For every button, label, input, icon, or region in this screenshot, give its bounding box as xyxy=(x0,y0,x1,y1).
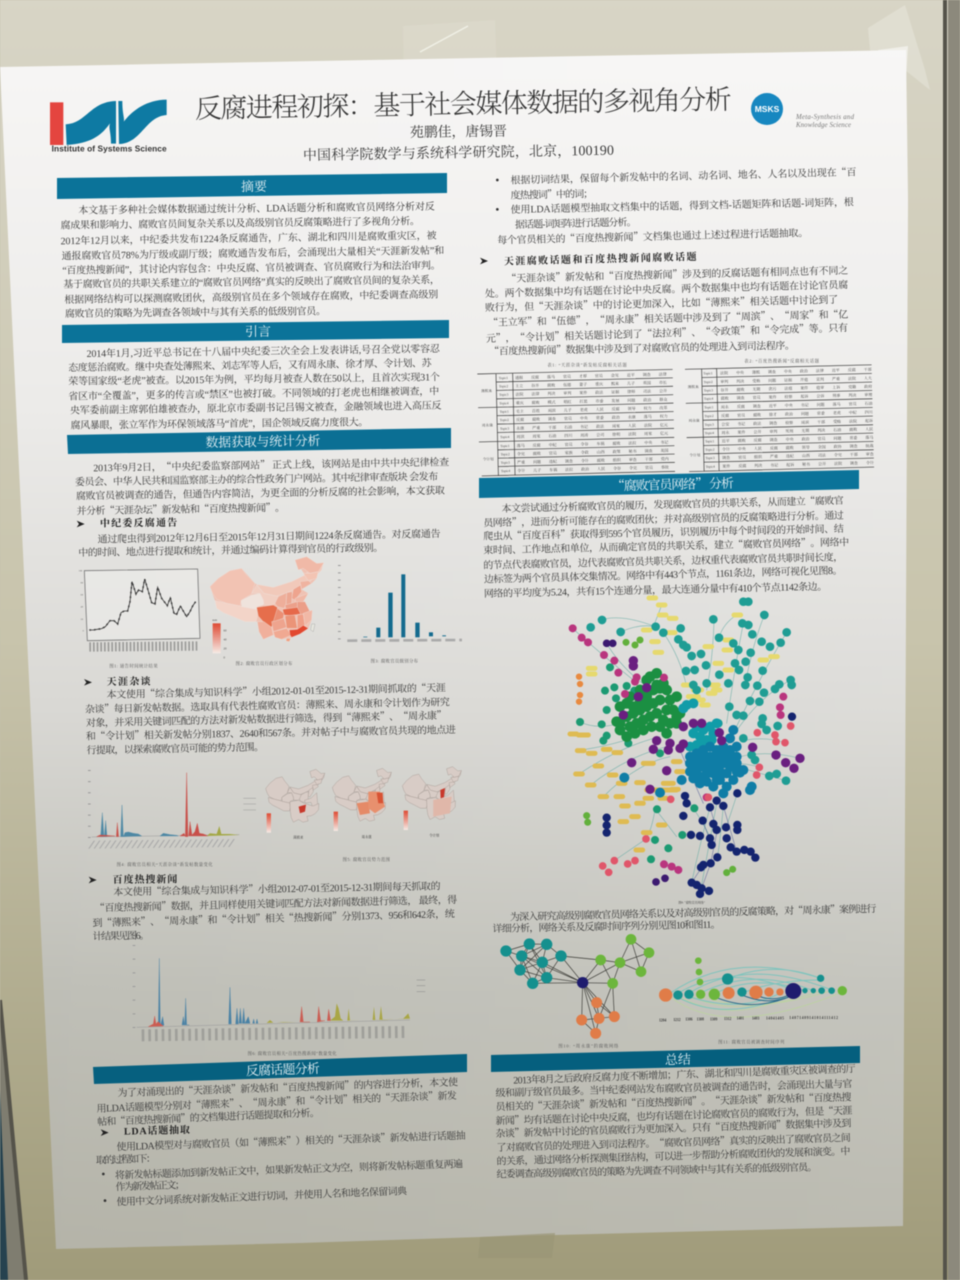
topic analysis text: 使用中文分词系统对新发帖正文进行切词，并使用人名和地名保留词典 xyxy=(116,1184,408,1208)
data section text: 通过爬虫得到2012年12月6日至2015年12月31日期间1224条反腐通告。对反腐通告 xyxy=(97,527,441,546)
right column top text: 度热搜词”中的词； xyxy=(510,186,593,202)
figure 3: officials by rank bar chart: 图3: 腐败官员级别分布 xyxy=(371,657,419,664)
table 1: tianya topics: Topic3 xyxy=(500,427,510,431)
tianya subsection: 本文使用“综合集成与知识科学”小组2012-01-01至2015-12-31期间抓取的“天涯 xyxy=(106,680,446,701)
topic analysis text xyxy=(96,1074,466,1208)
table 2: baidu topics: 公安 书记 政法 调查 检察 周滨 干部 受贿 法院 起诉 xyxy=(721,417,873,427)
topic analysis text: 用LDA话题模型分别对“薄熙来”、“周永康”和“令计划”相关的“天涯杂谈”新发 xyxy=(96,1088,457,1115)
section bar: topic analysis: 反腐话题分析 xyxy=(246,1061,320,1078)
MSKS logo: MSKS xyxy=(755,104,780,114)
introduction text: 荣等国家级“老虎”被查。以2015年为例，平均每月被查人数在50以上，且首次实现31个 xyxy=(68,370,440,388)
figure 3: officials by rank bar chart xyxy=(339,565,462,664)
figure 5: power range maps xyxy=(266,767,462,863)
table 1: tianya topics: Topic2 xyxy=(499,384,509,388)
section bar: network analysis xyxy=(479,470,859,498)
MSKS logo xyxy=(751,93,855,129)
network analysis text: 束时间、工作地点和单位，从而确定官员的共职关系，建立“腐败官员网络”。网络中 xyxy=(483,534,849,557)
summary text: 2013年8月之后政府反腐力度不断增加；广东、湖北和四川是腐败重灾区被调查的厅 xyxy=(513,1062,856,1087)
network follow-up text: 详细分析，网络关系及反腐时间序列分别见图10和图11。 xyxy=(492,918,721,935)
data section text: 中纪委反腐通告 xyxy=(100,516,177,530)
figure 11: investigation timeline: 1309 xyxy=(710,1017,717,1021)
summary text: 的关系，通过网络分析探测集团结构，可以进一步帮助分析腐败团伙的发展和演变。中 xyxy=(496,1144,851,1168)
figure 2: officials by province map: 60 xyxy=(223,629,227,633)
figure 5: power range maps: 令计划 xyxy=(429,833,440,838)
figure 2: officials by province map: 20 xyxy=(223,646,227,650)
table 2: baidu topics: Topic2 xyxy=(705,448,715,452)
table 1: tianya topics: Topic2 xyxy=(501,452,510,456)
figure 1: notice time line chart: 图1: 通告时间统计结果 xyxy=(109,663,158,670)
figure 1: notice time line chart: 100 xyxy=(79,570,83,573)
summary text: 新闻”均有话题在讨论中央反腐，也均有话题在讨论腐败官员的腐败行为，但是“天涯 xyxy=(495,1103,853,1127)
ISS logo xyxy=(50,100,167,153)
right column top text: 使用LDA话题模型抽取文档集中的话题，得到文档-话题矩阵和话题-词矩阵，根 xyxy=(510,195,854,216)
topic analysis text: 使用LDA模型对与腐败官员（如“薄熙来”）相关的“天涯杂谈”新发帖进行话题抽 xyxy=(116,1128,466,1153)
introduction text: 央军委前副主席郭伯雄被查办，原北京市委副书记吕锡文被查，金融领域也进入高压反 xyxy=(70,399,442,417)
table 2: baidu topics: 薄熙来 xyxy=(688,384,699,389)
section bar: introduction xyxy=(62,320,449,343)
table 1: tianya topics: Topic4 xyxy=(500,435,510,439)
table 2: baidu topics: Topic1 xyxy=(703,371,713,376)
table 1: tianya topics: 反腐 腐败 调查 官员 中央 常委 政治 永康 落马 权力 xyxy=(516,413,668,422)
abstract text: 2012年12月以来，中纪委共发布1224条反腐通告，广东、湖北和四川是腐败重灾区，被 xyxy=(61,229,437,247)
introduction text: 2014年1月,习近平总书记在十八届中央纪委三次全会上发表讲话,号召全党以零容忍 xyxy=(87,342,441,360)
table 2: baidu topics xyxy=(685,357,874,472)
abstract text: 腐败官员的策略为先调查各领域中与其有关系的低级别官员。 xyxy=(65,304,326,320)
topic analysis text: 作为新发帖正文； xyxy=(115,1178,185,1193)
table 1: tianya topics: Topic3 xyxy=(499,393,509,397)
table 1: tianya topics: 法院 法律 判决 审判 案件 政法 证据 律师 司法 公开 xyxy=(515,387,667,397)
subsection: corruption topics: “天涯杂谈”新发帖和“百度热搜新闻”涉及到的反腐话题有相同点也有不同之 xyxy=(506,263,848,285)
subsection: corruption topics: 败行为，但“天涯杂谈”中的讨论更加深入，比如“薄熙来”相关话题中讨论到了 xyxy=(485,292,838,314)
figure 8: corruption officials network: 图8: “腐败官员网络” xyxy=(678,900,706,905)
table 1: tianya topics: 永康 严重 干部 石油 书记 政法 周家 人民 法院 亿元 xyxy=(516,421,668,431)
table 1: tianya topics: Topic1 xyxy=(500,410,509,414)
table 2: baidu topics: 反腐 官员 腐败 徐才 政治 问题 常委 老虎 中纪 四川 xyxy=(721,408,873,418)
table 1: tianya topics xyxy=(477,362,675,476)
figure 1: notice time line chart xyxy=(79,569,200,670)
figure 11: investigation timeline: 1204 xyxy=(659,1018,666,1022)
baidu subsection xyxy=(89,872,457,943)
summary text: 杂谈”新发帖中讨论的官员腐败行为更加深入。只有“百度热搜新闻”数据集中涉及到 xyxy=(495,1115,852,1140)
table 2: baidu topics: Topic2 xyxy=(704,414,714,418)
tianya subsection: 行提取，以探索腐败官员可能的势力范围。 xyxy=(86,740,264,757)
introduction text: 态度惩治腐败。继中央查处薄熙来、刘志军等人后，又有周永康、徐才厚、令计划、苏 xyxy=(68,356,433,374)
introduction text: 腐风暴眼，张立军作为环保领域落马“首虎”，国企领域反腐力度很大。 xyxy=(71,415,368,432)
data section text xyxy=(75,454,449,559)
table 2: baidu topics: Topic2 xyxy=(704,380,713,384)
table 1: tianya topics: 王立 谷开 腐败 伍德 妻子 重庆 熙来 儿子 英国 市长 xyxy=(515,379,667,388)
section bar: summary xyxy=(491,1046,860,1072)
table 2: baidu topics: 周永 案件 公开 审判 死刑 无期 判决 石油 腐败 人民 xyxy=(721,425,873,435)
figure 10: Zhou Yongkang corruption network xyxy=(506,939,649,1049)
table 1: tianya topics: Topic3 xyxy=(501,461,510,465)
summary text xyxy=(495,1062,856,1181)
abstract text: 本文基于多种社会媒体数据通过统计分析、LDA话题分析和腐败官员网络分析对反 xyxy=(78,200,435,217)
figure 5: power range maps: 周永康 xyxy=(362,834,372,839)
summary text: 员相关的“天涯杂谈”新发帖和“百度热搜新闻”。“天涯杂谈”新发帖和“百度热搜 xyxy=(495,1089,852,1113)
table 2: baidu topics: Topic4 xyxy=(706,465,715,469)
table 1: tianya topics: 落马 反腐 中纪 官员 令谷 车祸 腐败 法拉 中央 书记 xyxy=(517,439,668,448)
table 1: tianya topics: Topic2 xyxy=(500,418,509,422)
table 2: baidu topics: 案件 反腐 判决 书记 起诉 秘书 公开 法院 调查 令计 xyxy=(722,459,874,469)
table 1: tianya topics: 周永康 xyxy=(482,422,493,428)
ISS logo: Institute of Systems Science xyxy=(52,143,167,153)
table 1: tianya topics: Topic1 xyxy=(499,376,508,380)
table 2: baidu topics: 表2: “百度热搜新闻”反腐相关话题 xyxy=(744,357,820,364)
topic analysis text: 取的过程如下： xyxy=(96,1152,156,1167)
network analysis text: 员网络”，进而分析可能存在的腐败团伙；并对高级别官员的反腐策略进行分析。通过 xyxy=(483,508,844,529)
section bar: network analysis: “腐败官员网络” 分析 xyxy=(612,473,734,494)
authors: 苑鹏佳，唐锡晋 xyxy=(410,123,507,141)
section bar: abstract: 摘要 xyxy=(241,179,267,194)
summary text: 级和副厅级官员最多。当中纪委网站发布腐败官员被调查的通告时，会涌现出大量与官 xyxy=(495,1077,853,1099)
table 2: baidu topics: 调查 官员 组织 严重 违纪 山西 司法 令完 干部 审查 xyxy=(722,450,874,460)
table 1: tianya topics: 通报 反腐 落马 官员 才厚 官员 会见 近平 调查 法律 xyxy=(515,371,667,380)
table 2: baidu topics: 令计 中央 人民 反腐 腐败 领导 全国 政协 调查 统战 xyxy=(722,442,874,452)
figure 11: investigation timeline xyxy=(659,957,847,1045)
figure 1: notice time line chart: 80 xyxy=(81,581,84,584)
abstract text: 通报腐败官员78%为厅级或副厅级；腐败通告发布后，会涌现出大量相关“天涯新发帖”和 xyxy=(62,244,444,262)
table 2: baidu topics: 周永康 xyxy=(688,418,700,423)
baidu subsection: 本文使用“综合集成与知识科学”小组2012-07-01至2015-12-31期间每天抓取的 xyxy=(113,878,441,898)
tianya subsection: 杂谈”每日新发帖数据。选取具有代表性腐败官员：薄熙来、周永康和令计划作为研究 xyxy=(85,694,450,716)
figure 2: officials by province map: 40 xyxy=(223,638,227,642)
subsection: corruption topics: 元”，“令计划”相关话题讨论到了“法拉利”、“令政策”和“令完成”等。只有 xyxy=(486,320,848,345)
table 1: tianya topics: Topic1 xyxy=(500,444,510,448)
table 1: tianya topics: 令完 腐败 官员 家族 令政 山西 政策 秘书 调查 美国 xyxy=(517,447,669,456)
right column top text xyxy=(496,164,857,247)
network analysis text: 的节点代表腐败官员，边代表腐败官员共职关系，边权重代表腐败官员共职时间长度， xyxy=(483,550,843,572)
figure 8: corruption officials network xyxy=(570,598,800,905)
subsection: corruption topics: 处。两个数据集中均有话题在讨论中央反腐。两个数据集中也均有话题在讨论官员腐 xyxy=(485,278,848,300)
network analysis text: 边标签为两个官员具体交集情况。网络中有443个节点，1161条边，网络可视化见图8。 xyxy=(484,564,843,586)
baidu subsection: 计结果见图6。 xyxy=(92,929,149,943)
data section text: 腐败官员被调查的通告，但通告内容简洁，为更全面的分析反腐的社会影响，本文获取 xyxy=(76,484,445,502)
table 2: baidu topics: 谷开 腐败 无期 贪污 法庭 案件 庭审 上诉 党籍 政府 xyxy=(720,383,872,392)
network analysis text: 爬虫从“百度百科”获取得到595个官员履历，识别履历中每个时间段的开始时间、结 xyxy=(483,521,844,543)
baidu subsection: “百度热搜新闻”数据，并且同样使用关键词匹配方法对新闻数据进行筛选， 最终，得 xyxy=(95,892,457,914)
table 2: baidu topics: Topic3 xyxy=(705,456,715,460)
subsection: corruption topics: “百度热搜新闻”数据集中涉及到了对腐败官员的处理进入到司法程序。 xyxy=(489,338,795,358)
table 2: baidu topics: 法院 中央 薄熙 调查 中央 政治 法律 近平 反腐 干部 xyxy=(720,366,872,375)
table 2: baidu topics: Topic3 xyxy=(705,423,714,427)
table 1: tianya topics: Topic4 xyxy=(501,469,511,473)
figure 5: power range maps: 薄熙来 xyxy=(293,835,304,840)
right column top text: 据话题-词矩阵进行话题分析。 xyxy=(515,215,637,231)
figure 5: power range maps: 图5: 腐败官员势力范围 xyxy=(343,856,391,863)
abstract text xyxy=(61,200,444,320)
introduction text: 省区市“全覆盖”，更多的传言或“禁区”也被打破。不同领域的打老虎也相继被调查，中 xyxy=(68,384,439,403)
subsection: corruption topics: 天涯腐败话题和百度热搜新闻腐败话题 xyxy=(504,250,697,268)
table 2: baidu topics: Topic4 xyxy=(705,431,714,435)
figure 11: investigation timeline: 1212 xyxy=(673,1018,681,1022)
table 2: baidu topics: 令计划 xyxy=(689,452,701,458)
figure 2: officials by province map: 图2: 腐败官员行政区划分布 xyxy=(236,660,293,667)
table 1: tianya topics: 令计 儿子 车祸 法拉 政治 人民 令谷 令完 官员 事故 xyxy=(517,464,669,473)
figure 10: Zhou Yongkang corruption network: 图10: “周永康”的腐败网络 xyxy=(558,1042,619,1049)
right column top text: 根据切词结果，保留每个新发帖中的名词、动名词、地名、人名以及出现在“百 xyxy=(510,164,857,187)
tape at top centre xyxy=(403,5,930,90)
section bar: summary: 总结 xyxy=(665,1052,691,1067)
table 2: baidu topics: Topic1 xyxy=(705,439,715,444)
section bar: topic analysis xyxy=(93,1054,467,1084)
figure 1: notice time line chart: 60 xyxy=(81,594,84,597)
introduction text xyxy=(68,342,442,432)
subsection: corruption topics xyxy=(480,250,848,358)
network follow-up text xyxy=(492,901,877,935)
title: 反腐进程初探：基于社会媒体数据的多视角分析 xyxy=(195,85,732,124)
figure 11: investigation timeline: 1306 xyxy=(685,1018,693,1022)
section bar: data and statistics: 数据获取与统计分析 xyxy=(205,433,321,450)
tianya subsection: 和“令计划”相关新发帖分别1837、2640和567条。并对帖子中与腐败官员共现的地点进 xyxy=(86,722,456,743)
subsection: corruption topics: “王立军”和“伍德”，“周永康”相关话题中涉及到了“周滨”、“周家”和“亿 xyxy=(488,307,848,329)
figure 1: notice time line chart: 40 xyxy=(81,606,84,609)
right column top text: 每个官员相关的“百度热搜新闻”文档集也通过上述过程进行话题抽取。 xyxy=(497,225,808,247)
figure 2: officials by province map xyxy=(210,557,324,667)
abstract text: 基于腐败官员的共职关系建立的“腐败官员网络”真实的反映出了腐败官员间的复杂关系， xyxy=(63,273,440,291)
summary text: 纪委调查高级别腐败官员的策略为先调查不同领域中与其有关系的低级别官员。 xyxy=(496,1160,817,1181)
MSKS logo: Meta-Synthesis and xyxy=(795,114,855,121)
topic analysis text: 帖和“百度热搜新闻”的文档集进行话题提取和分析。 xyxy=(97,1105,320,1128)
table 1: tianya topics: 严重 问题 违纪 调查 令计 腐败 组织 审查 干部 党内 xyxy=(517,455,669,465)
table 2: baidu topics: 周永 反腐 调查 近平 中央 书记 问题 落马 官员 石油 xyxy=(721,400,873,409)
network analysis text xyxy=(483,493,849,600)
figure 2: officials by province map: 0 xyxy=(223,655,225,659)
data section text: 2013年9月2日，“中央纪委监察部网站” 正式上线，该网站是由中共中央纪律检查 xyxy=(93,454,449,474)
tianya subsection: 天涯杂谈 xyxy=(107,675,151,688)
figure 1: notice time line chart: 20 xyxy=(81,618,84,621)
baidu subsection: 百度热搜新闻 xyxy=(113,872,177,886)
table 1: tianya topics: 薄熙来 xyxy=(481,388,492,393)
table 1: tianya topics: 毛主 百姓 周滨 儿子 老虎 人民 反腐 领导 权力 改革 xyxy=(516,404,668,414)
figure 11: investigation timeline: 14071409141014111412 xyxy=(789,1016,838,1020)
abstract text: “百度热搜新闻”，其讨论内容包含：中央反腐、官员被调查、官员腐败行为和法治审判。 xyxy=(62,259,441,277)
table 2: baidu topics: 近平 腐败 反腐 调查 中央 政治 官员 问题 常委 落马 xyxy=(722,434,873,443)
figure 1: notice time line chart: 0 xyxy=(83,630,85,633)
summary text: 了对腐败官员的处理进入到司法程序。“腐败官员网络”真实的反映出了腐败官员之间 xyxy=(496,1130,851,1154)
figure 11: investigation timeline: 1403 xyxy=(752,1016,759,1020)
figure 2: officials by province map: num xyxy=(212,619,218,622)
figure 6: baidu news over time xyxy=(134,945,425,1057)
section bar: introduction: 引言 xyxy=(245,324,271,339)
figure 11: investigation timeline: 1312 xyxy=(724,1017,731,1021)
network follow-up text: 为深入研究高级别腐败官员网络关系以及对高级别官员的反腐策略，对“周永康”案例进行 xyxy=(510,901,877,923)
figure 6: baidu news over time: 图6: 腐败官员相关“百度热搜新闻”数量变化 xyxy=(248,1050,337,1057)
data section text: 委员会、中华人民共和国监察部主办的综合性政务门户网站。其中纪律审查版块 会发布 xyxy=(75,470,438,488)
table 2: baidu topics: Topic4 xyxy=(704,397,714,401)
data section text: 中的时间、地点进行提取和统计，并通过编码计算得到官员的行政级别。 xyxy=(78,541,383,559)
figure 11: investigation timeline: 图11: 腐败官员被调查时间序列 xyxy=(718,1038,785,1045)
network analysis text: 网络的平均度为5.24，共有15个连通分量，最大连通分量中有410个节点1142条边。 xyxy=(484,580,827,600)
baidu subsection: 到“薄熙来”、“周永康”和“令计划”相关“热搜新闻”分别1373、956和642条，统 xyxy=(92,906,455,929)
figure 4: tianya posts over time xyxy=(89,770,256,868)
figure 4: tianya posts over time: 图4: 腐败官员相关“天涯杂谈”新发帖数量变化 xyxy=(117,861,213,868)
topic analysis text: 为了对涌现出的“天涯杂谈”新发帖和“百度热搜新闻”的内容进行分析，本文使 xyxy=(117,1074,458,1099)
table 1: tianya topics: Topic4 xyxy=(499,401,509,405)
table 2: baidu topics: 腐败 调查 官员 案件 检察 起诉 公诉 刑事 判决 审理 xyxy=(721,391,872,401)
table 1: tianya topics: 令计划 xyxy=(483,456,494,462)
table 1: tianya topics: 表1: “天涯杂谈”新发帖反腐相关话题 xyxy=(547,362,627,369)
tianya subsection: 对象，并采用关键词匹配的方法对新发帖数据进行筛选，得到“薄熙来”、“周永康” xyxy=(86,708,447,729)
abstract text: 根据网络结构可以探测腐败团伙，高级别官员在多个领域存在腐败，中纪委调查高级别 xyxy=(64,288,438,306)
data section text: 并分析“天涯杂坛”新发帖和“百度热搜新闻”。 xyxy=(76,500,285,517)
table 2: baidu topics: 审判 判决 受贿 问题 证据 开庭 宣判 严重 法院 人大 xyxy=(720,374,872,384)
network analysis text: 本文尝试通过分析腐败官员的履历，发现腐败官员的共职关系，从而建立“腐败官 xyxy=(501,493,844,515)
abstract text: 腐成果和影响力、腐败官员间复杂关系以及高级别官员反腐策略进行了多视角分析。 xyxy=(61,214,420,232)
table 2: baidu topics: Topic3 xyxy=(704,388,713,393)
figure 11: investigation timeline: 1308 xyxy=(697,1018,704,1022)
section bar: abstract xyxy=(57,173,447,199)
figure 11: investigation timeline: 14041405 xyxy=(766,1016,784,1020)
table 2: baidu topics: Topic1 xyxy=(704,405,714,410)
figure 11: investigation timeline: 1401 xyxy=(737,1017,744,1021)
table 1: tianya topics: 重庆 腐败 模式 唱红 打黑 市委 发展 问题 政治 群众 xyxy=(516,396,667,405)
affiliation: 中国科学院数学与系统科学研究院，北京，100190 xyxy=(303,142,614,164)
table 1: tianya topics: 周滨 周家 石油 四川 周涛 公司 徐明 法院 周家 亿元 xyxy=(516,430,668,439)
tianya subsection xyxy=(84,675,456,757)
topic analysis text: LDA话题抽取 xyxy=(124,1123,190,1138)
topic analysis text: 将新发帖标题添加到新发帖正文中，如果新发帖正文为空，则将新发帖标题重复两遍 xyxy=(115,1157,463,1182)
section bar: data and statistics xyxy=(67,428,451,454)
MSKS logo: Knowledge Science xyxy=(795,122,851,129)
